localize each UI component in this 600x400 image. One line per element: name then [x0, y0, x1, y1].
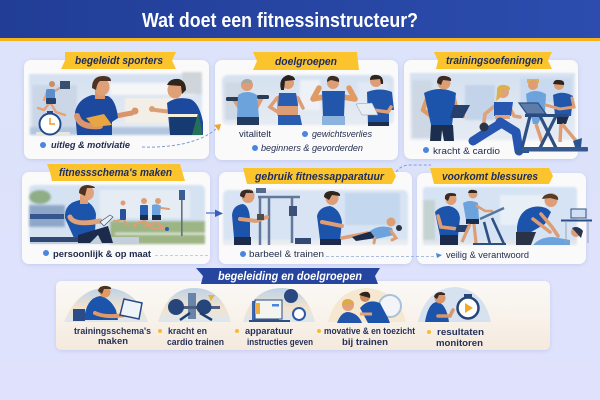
labels: apparatuur instructies geven — [235, 326, 313, 347]
figure: oudere man met dumbbells — [226, 79, 269, 125]
illustration: krachtstation — [256, 188, 311, 245]
caption: uitleg: uitleg & motiviatie — [51, 140, 131, 151]
labels: kracht en cardio trainen: kracht en — [168, 326, 207, 336]
illustration: loopband — [473, 208, 506, 245]
figure: patiënt — [533, 227, 583, 245]
labels: resultaten monitoren — [427, 327, 484, 348]
figure: man met tablet — [356, 75, 394, 126]
caption: persoonlijk: persoonlijk & op maat — [53, 249, 152, 260]
labels: movative en toezicht — [317, 326, 415, 347]
figure: sporter — [149, 79, 203, 135]
labels: trainingsschema's maken: maken — [98, 336, 128, 346]
arrow: naar veilig — [326, 253, 442, 258]
figure: trainer met klembord — [435, 193, 471, 245]
caption: veilig: veilig & verantwoord — [446, 250, 529, 261]
captions: doelgroepen: gewichtsverlies — [312, 129, 372, 140]
icon: stopwatch — [36, 111, 70, 135]
figure: hardlopers — [114, 198, 169, 231]
figure: vrouw met kettlebell — [473, 85, 529, 153]
vignette: stopwatch — [418, 287, 491, 322]
figure: trainer — [75, 76, 138, 135]
figure: man in plank — [342, 218, 402, 243]
figure: krachtige man — [313, 76, 355, 125]
banner: gebruik fitnessapparatuur: gebruik fitnessapparatuur — [254, 171, 385, 183]
caption: kracht & cardio: kracht & cardio — [433, 146, 500, 157]
banner: begeleiding en doelgroepen — [196, 268, 380, 284]
arrow: boven voorkomt blessures — [396, 165, 431, 172]
captions: doelgroepen: beginners & gevorderden — [261, 143, 363, 154]
vignette: dumbbell — [158, 288, 231, 322]
captions: doelgroepen — [239, 129, 372, 154]
scene: gym background — [223, 190, 408, 245]
banner: begeleiding en doelgroepen: begeleiding en doelgroepen — [218, 271, 362, 283]
figure: trainer met gekruiste armen — [317, 191, 342, 245]
caption: barbeel: barbeel & trainen — [249, 249, 324, 260]
banner: voorkomt blessures — [430, 168, 553, 184]
header bar — [0, 0, 600, 41]
arrow: naar gebruik fitnessapparatuur — [206, 210, 223, 217]
labels: apparatuur instructies geven: instructies geven — [247, 337, 313, 347]
title: Wat doet een fitnessinstructeur? — [142, 10, 418, 32]
labels: kracht en cardio trainen: cardio trainen — [167, 337, 224, 347]
panel: begeleiding en doelgroepen — [56, 281, 550, 350]
labels: apparatuur instructies geven: apparatuur — [245, 326, 294, 336]
arrow: naar doelgroepen — [142, 124, 221, 147]
panel: begeleidt sporters — [24, 52, 209, 159]
panel: voorkomt blessures — [417, 168, 592, 264]
banner: trainingsoefeningen — [434, 52, 552, 69]
banner: begeleidt sporters — [61, 52, 176, 69]
panel: trainingsoefeningen — [404, 52, 588, 159]
vignette: apparatuur — [243, 288, 315, 322]
figure: loper op loopband — [462, 190, 492, 243]
banner: fitnessschema's maken: fitnessschema's maken — [59, 167, 172, 179]
scene: sportveld — [29, 185, 205, 244]
banner: doelgroepen — [253, 52, 359, 70]
scene: gym background — [222, 75, 394, 125]
figure: runner — [38, 81, 70, 115]
figure: trainer met schema — [65, 185, 113, 243]
figure: trainer aan machine — [232, 189, 267, 245]
vignette: toezicht — [328, 288, 406, 323]
scene: gym background — [410, 73, 575, 140]
vignette: trainingsschema's maken — [64, 286, 148, 322]
labels: movative en toezicht: movative & en toezicht — [324, 326, 415, 336]
scene: gym background — [29, 72, 202, 135]
labels: resultaten monitoren: resultaten — [437, 327, 484, 337]
panel: doelgroepen — [215, 52, 398, 160]
illustration: basketbalpaal — [179, 190, 185, 236]
labels: trainingsschema's maken — [74, 326, 151, 346]
labels: kracht en cardio trainen — [158, 326, 224, 347]
figure: trainer met klembord — [423, 76, 470, 141]
labels: movative en toezicht: bij trainen — [342, 337, 388, 347]
arrow: persoonlijk naar barbeel — [155, 254, 210, 256]
illustration: loopband — [519, 103, 588, 152]
figure: twee sporters — [526, 79, 582, 147]
panel: gebruik fitnessapparatuur — [219, 168, 412, 264]
banner: doelgroepen: doelgroepen — [275, 56, 338, 68]
labels: resultaten monitoren: monitoren — [436, 338, 483, 348]
banner: gebruik fitnessapparatuur — [243, 168, 396, 184]
illustration: tribune en bank — [30, 214, 139, 244]
illustration: bijzettafel met laptop — [561, 209, 592, 243]
banner: fitnessschema's maken — [47, 164, 185, 181]
captions: doelgroepen: vitalitelt — [239, 129, 271, 140]
labels: trainingsschema's maken: trainingsschema's — [74, 326, 151, 336]
figure: begeleider bij patiënt — [516, 193, 558, 245]
banner: voorkomt blessures: voorkomt blessures — [442, 171, 538, 183]
panel: fitnessschema's maken — [22, 164, 210, 264]
banner: trainingsoefeningen: trainingsoefeningen — [446, 55, 543, 67]
banner: begeleidt sporters: begeleidt sporters — [75, 55, 163, 67]
scene: gym background — [423, 187, 577, 245]
figure: vrouw — [270, 75, 303, 125]
